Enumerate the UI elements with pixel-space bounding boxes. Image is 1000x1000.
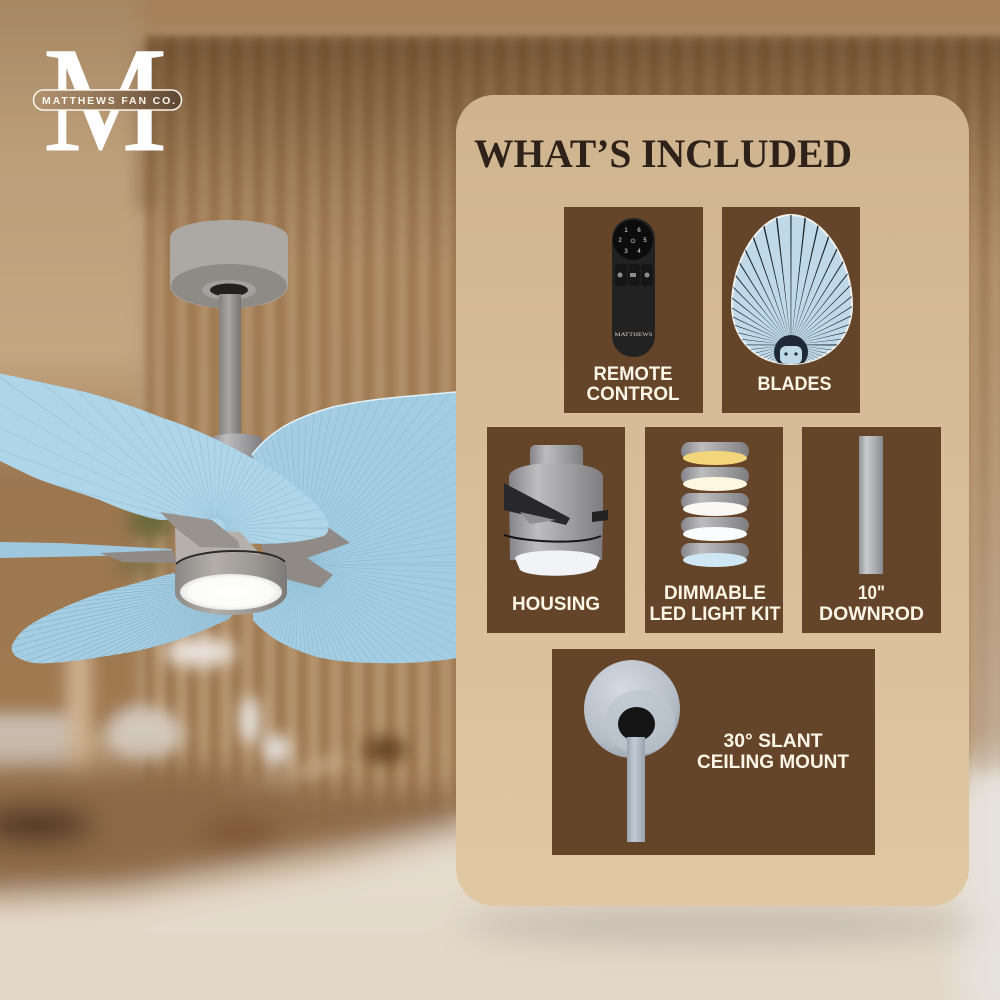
icon: remote: 2 <box>618 238 622 244</box>
blade: right <box>252 392 456 664</box>
upper blade arm <box>160 512 240 548</box>
icon: palm blade <box>731 214 853 365</box>
logo: Matthews Fan Co.: MATTHEWS FAN CO. <box>42 95 175 107</box>
card: downrod <box>802 427 941 633</box>
icon: remote: ⏻ <box>631 238 636 245</box>
label: DIMMABLE <box>664 582 766 604</box>
label: 30° SLANT <box>724 730 823 752</box>
icon: remote: 6 <box>637 228 641 234</box>
card: housing <box>487 427 625 633</box>
label: CONTROL <box>586 383 680 405</box>
blade: far left <box>0 542 172 558</box>
logo: Matthews Fan Co.: M <box>43 17 167 183</box>
icon: remote: 4 <box>637 249 641 255</box>
fan canopy <box>170 220 288 308</box>
blade: lower left <box>12 573 233 664</box>
label: BLADES <box>758 373 832 395</box>
icon: motor housing <box>504 445 608 576</box>
ceiling fan <box>0 220 460 740</box>
label <box>650 582 781 625</box>
card: remote control <box>564 207 703 413</box>
motor neck <box>175 528 262 566</box>
card: dimmable LED light kit <box>645 427 783 633</box>
label: CEILING MOUNT <box>697 751 849 773</box>
icon: downrod <box>859 436 883 574</box>
motor ring <box>176 551 285 564</box>
label: 10" <box>858 582 885 604</box>
icon: remote: 5 <box>643 238 647 244</box>
card: slant ceiling mount <box>552 649 875 855</box>
icon: slant mount <box>584 660 680 842</box>
panel: what's included <box>456 95 969 906</box>
left blade arm <box>100 550 177 563</box>
icon: remote: 3 <box>624 249 628 255</box>
label: LED LIGHT KIT <box>650 603 781 625</box>
motor housing <box>175 552 287 615</box>
label <box>586 363 680 405</box>
label <box>819 582 924 625</box>
blade: upper left <box>0 373 328 544</box>
label: DOWNROD <box>819 603 924 625</box>
label: HOUSING <box>512 593 600 615</box>
label <box>697 730 849 773</box>
LED light <box>180 574 282 610</box>
card: blades <box>722 207 860 413</box>
title: WHAT’S INCLUDED <box>474 131 852 176</box>
icon: remote: MATTHEWS <box>614 332 652 338</box>
downrod <box>219 294 241 436</box>
blade: right edge highlight <box>252 392 456 455</box>
icon: remote <box>612 218 655 357</box>
icon: remote: 1 <box>624 228 628 234</box>
label: REMOTE <box>594 363 672 385</box>
icon: LED colour temperature stack <box>681 442 749 567</box>
coupling cover <box>210 434 262 470</box>
right blade arm <box>260 525 350 588</box>
